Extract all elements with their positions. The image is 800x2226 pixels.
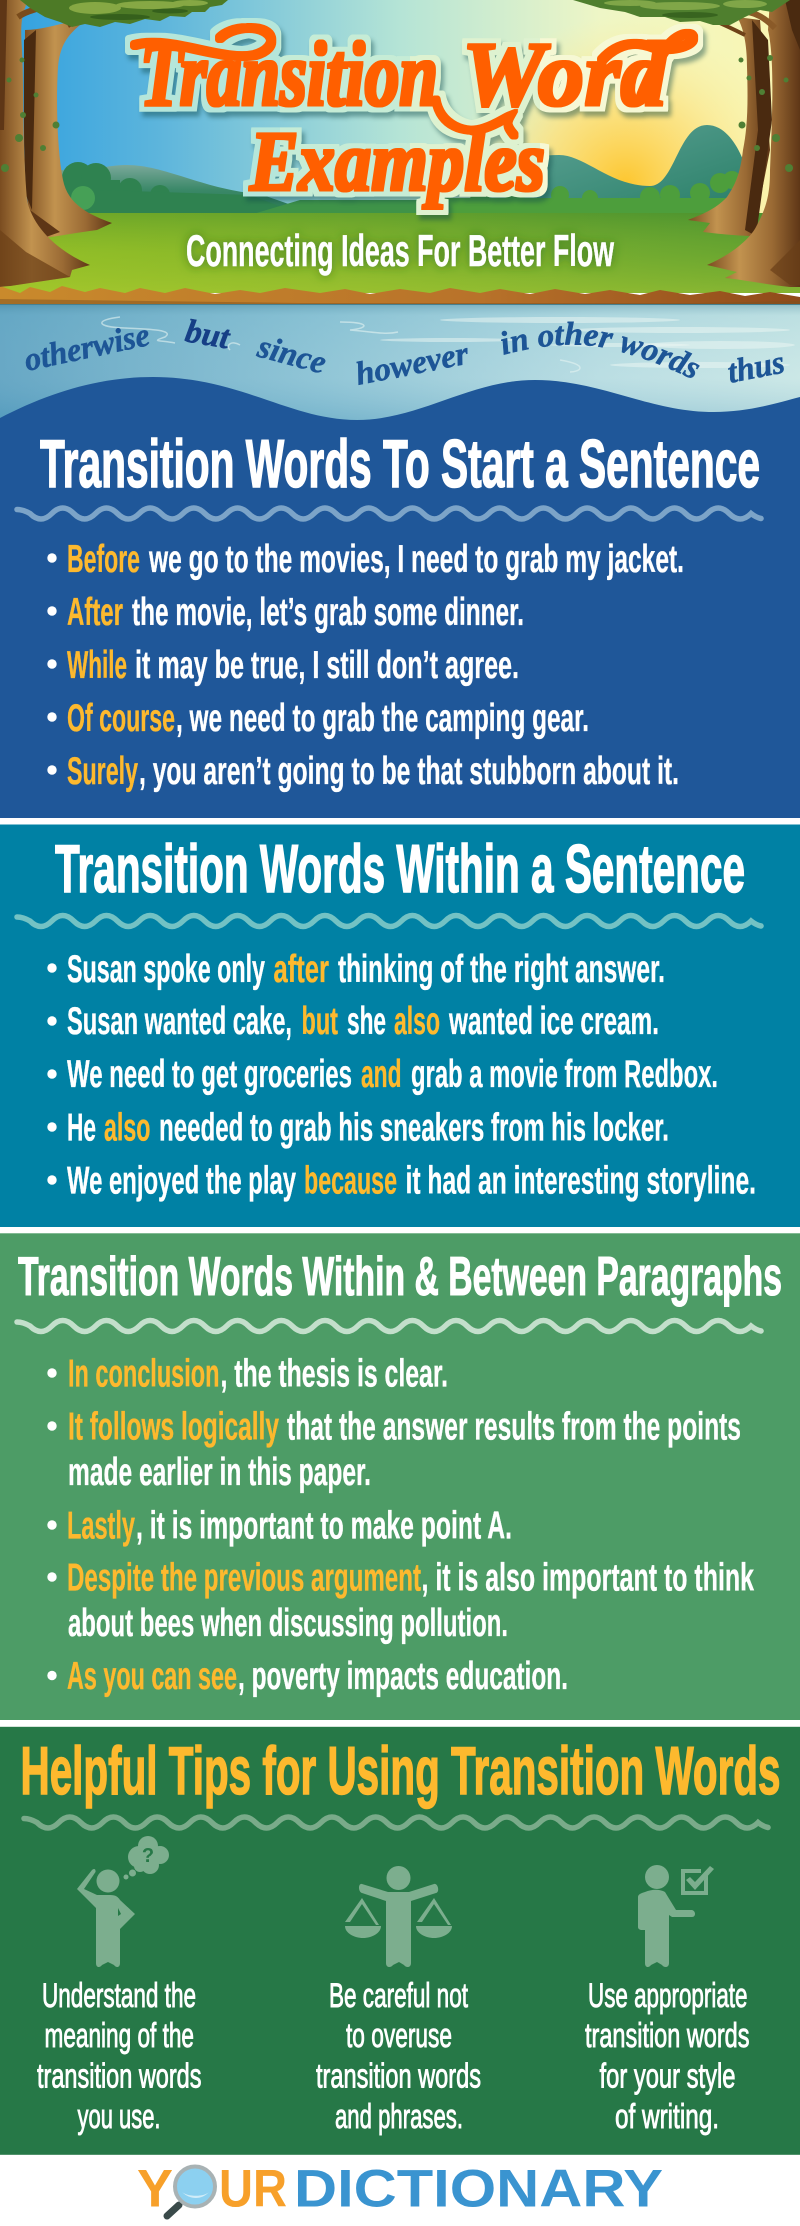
icon: person with checkbox [638, 1865, 714, 1967]
floating words on the water [21, 313, 787, 393]
tip 3 [585, 1977, 750, 2136]
bullet list: It follows logically [68, 1406, 279, 1448]
icon: thought cloud: ? [142, 1845, 154, 1867]
footer logo: DICTIONARY [294, 2160, 663, 2218]
bullet list: , poverty impacts education. [238, 1655, 568, 1698]
tip 2 [316, 1977, 481, 2136]
bullet list [47, 1352, 754, 1698]
floating words on the water: otherwise [21, 317, 153, 379]
tip 1 [37, 1977, 202, 2136]
bullet list: it may be true, I still don’t agree. [135, 644, 519, 687]
bullet list: Of course [67, 697, 175, 740]
bullet list: Surely [67, 750, 138, 793]
icon: thinking person [77, 1836, 169, 1967]
bullet list: After [67, 591, 123, 634]
bullet list: made earlier in this paper. [68, 1451, 371, 1494]
tip 2: and phrases. [335, 2098, 463, 2136]
tip 3: of writing. [615, 2098, 719, 2136]
footer logo [0, 2155, 800, 2226]
floating words on the water: but [183, 313, 233, 357]
bullet list: because [304, 1160, 397, 1202]
title: Word [462, 23, 669, 125]
bullet list: Lastly [67, 1504, 135, 1548]
tip 2: transition words [316, 2058, 481, 2096]
bullet list: after [274, 948, 329, 991]
bullet list: also [394, 1000, 440, 1043]
bullet list: While [67, 644, 127, 687]
meadow [0, 213, 800, 293]
tip 2: Be careful not [329, 1977, 468, 2015]
river bank [0, 286, 800, 304]
footer logo: Y [137, 2160, 173, 2218]
tip 1: transition words [37, 2058, 202, 2096]
bullet list: Despite the previous argument [67, 1556, 421, 1600]
tip 1: Understand the [42, 1977, 196, 2015]
tip 1: meaning of the [44, 2017, 194, 2055]
bullet list: We need to get groceries [67, 1053, 352, 1096]
bullet list: In conclusion [68, 1352, 220, 1396]
bullet list: Susan spoke only [67, 948, 265, 991]
right foliage [573, 0, 790, 25]
bullet list [47, 538, 684, 793]
tip 1: you use. [78, 2098, 160, 2136]
hills [60, 125, 745, 215]
bullet list: As you can see [67, 1655, 237, 1698]
tip 3: for your style [600, 2058, 736, 2096]
bushes [60, 162, 741, 215]
floating words on the water: however [353, 336, 473, 393]
bullet list: also [104, 1106, 150, 1150]
wave top of first panel [0, 377, 800, 432]
bullet list: , the thesis is clear. [220, 1352, 448, 1396]
floating words on the water: in other words [501, 322, 700, 378]
right tree [682, 0, 800, 287]
panel: start a sentence [0, 425, 800, 818]
floating words on the water: since [253, 329, 330, 382]
bullet list: and [361, 1053, 402, 1096]
left foliage [0, 0, 228, 27]
water [0, 300, 800, 430]
bullet list: We enjoyed the play [67, 1160, 296, 1202]
panel: forest lake scene [0, 0, 800, 430]
tip 2: to overuse [346, 2017, 452, 2055]
icon: balance scale person [345, 1866, 452, 1967]
bullet list: but [302, 1000, 338, 1043]
bullet list [47, 948, 756, 1202]
panel: helpful tips [0, 1727, 800, 2155]
title: Examples [249, 113, 545, 209]
bullet list: He [67, 1106, 96, 1150]
bullet list: she [347, 1000, 386, 1043]
footer logo: UR [219, 2160, 287, 2218]
title: Transition [140, 23, 438, 125]
floating words on the water: thus [725, 345, 787, 391]
title [135, 23, 693, 209]
sun glow [400, 0, 800, 215]
bullet list: wanted ice cream. [448, 1000, 659, 1043]
bullet list: about bees when discussing pollution. [68, 1602, 508, 1645]
left tree [0, 0, 118, 287]
panel: within a sentence [0, 824, 800, 1227]
bullet list: Before [67, 538, 140, 581]
icon: magnifying glass [167, 2166, 215, 2216]
bullet list: Susan wanted cake, [67, 1000, 292, 1043]
panel: within and between paragraphs [0, 1233, 800, 1720]
sky [0, 0, 800, 215]
bullet list: the movie, let’s grab some dinner. [132, 591, 524, 634]
bullet list: , it is important to make point A. [136, 1504, 512, 1548]
